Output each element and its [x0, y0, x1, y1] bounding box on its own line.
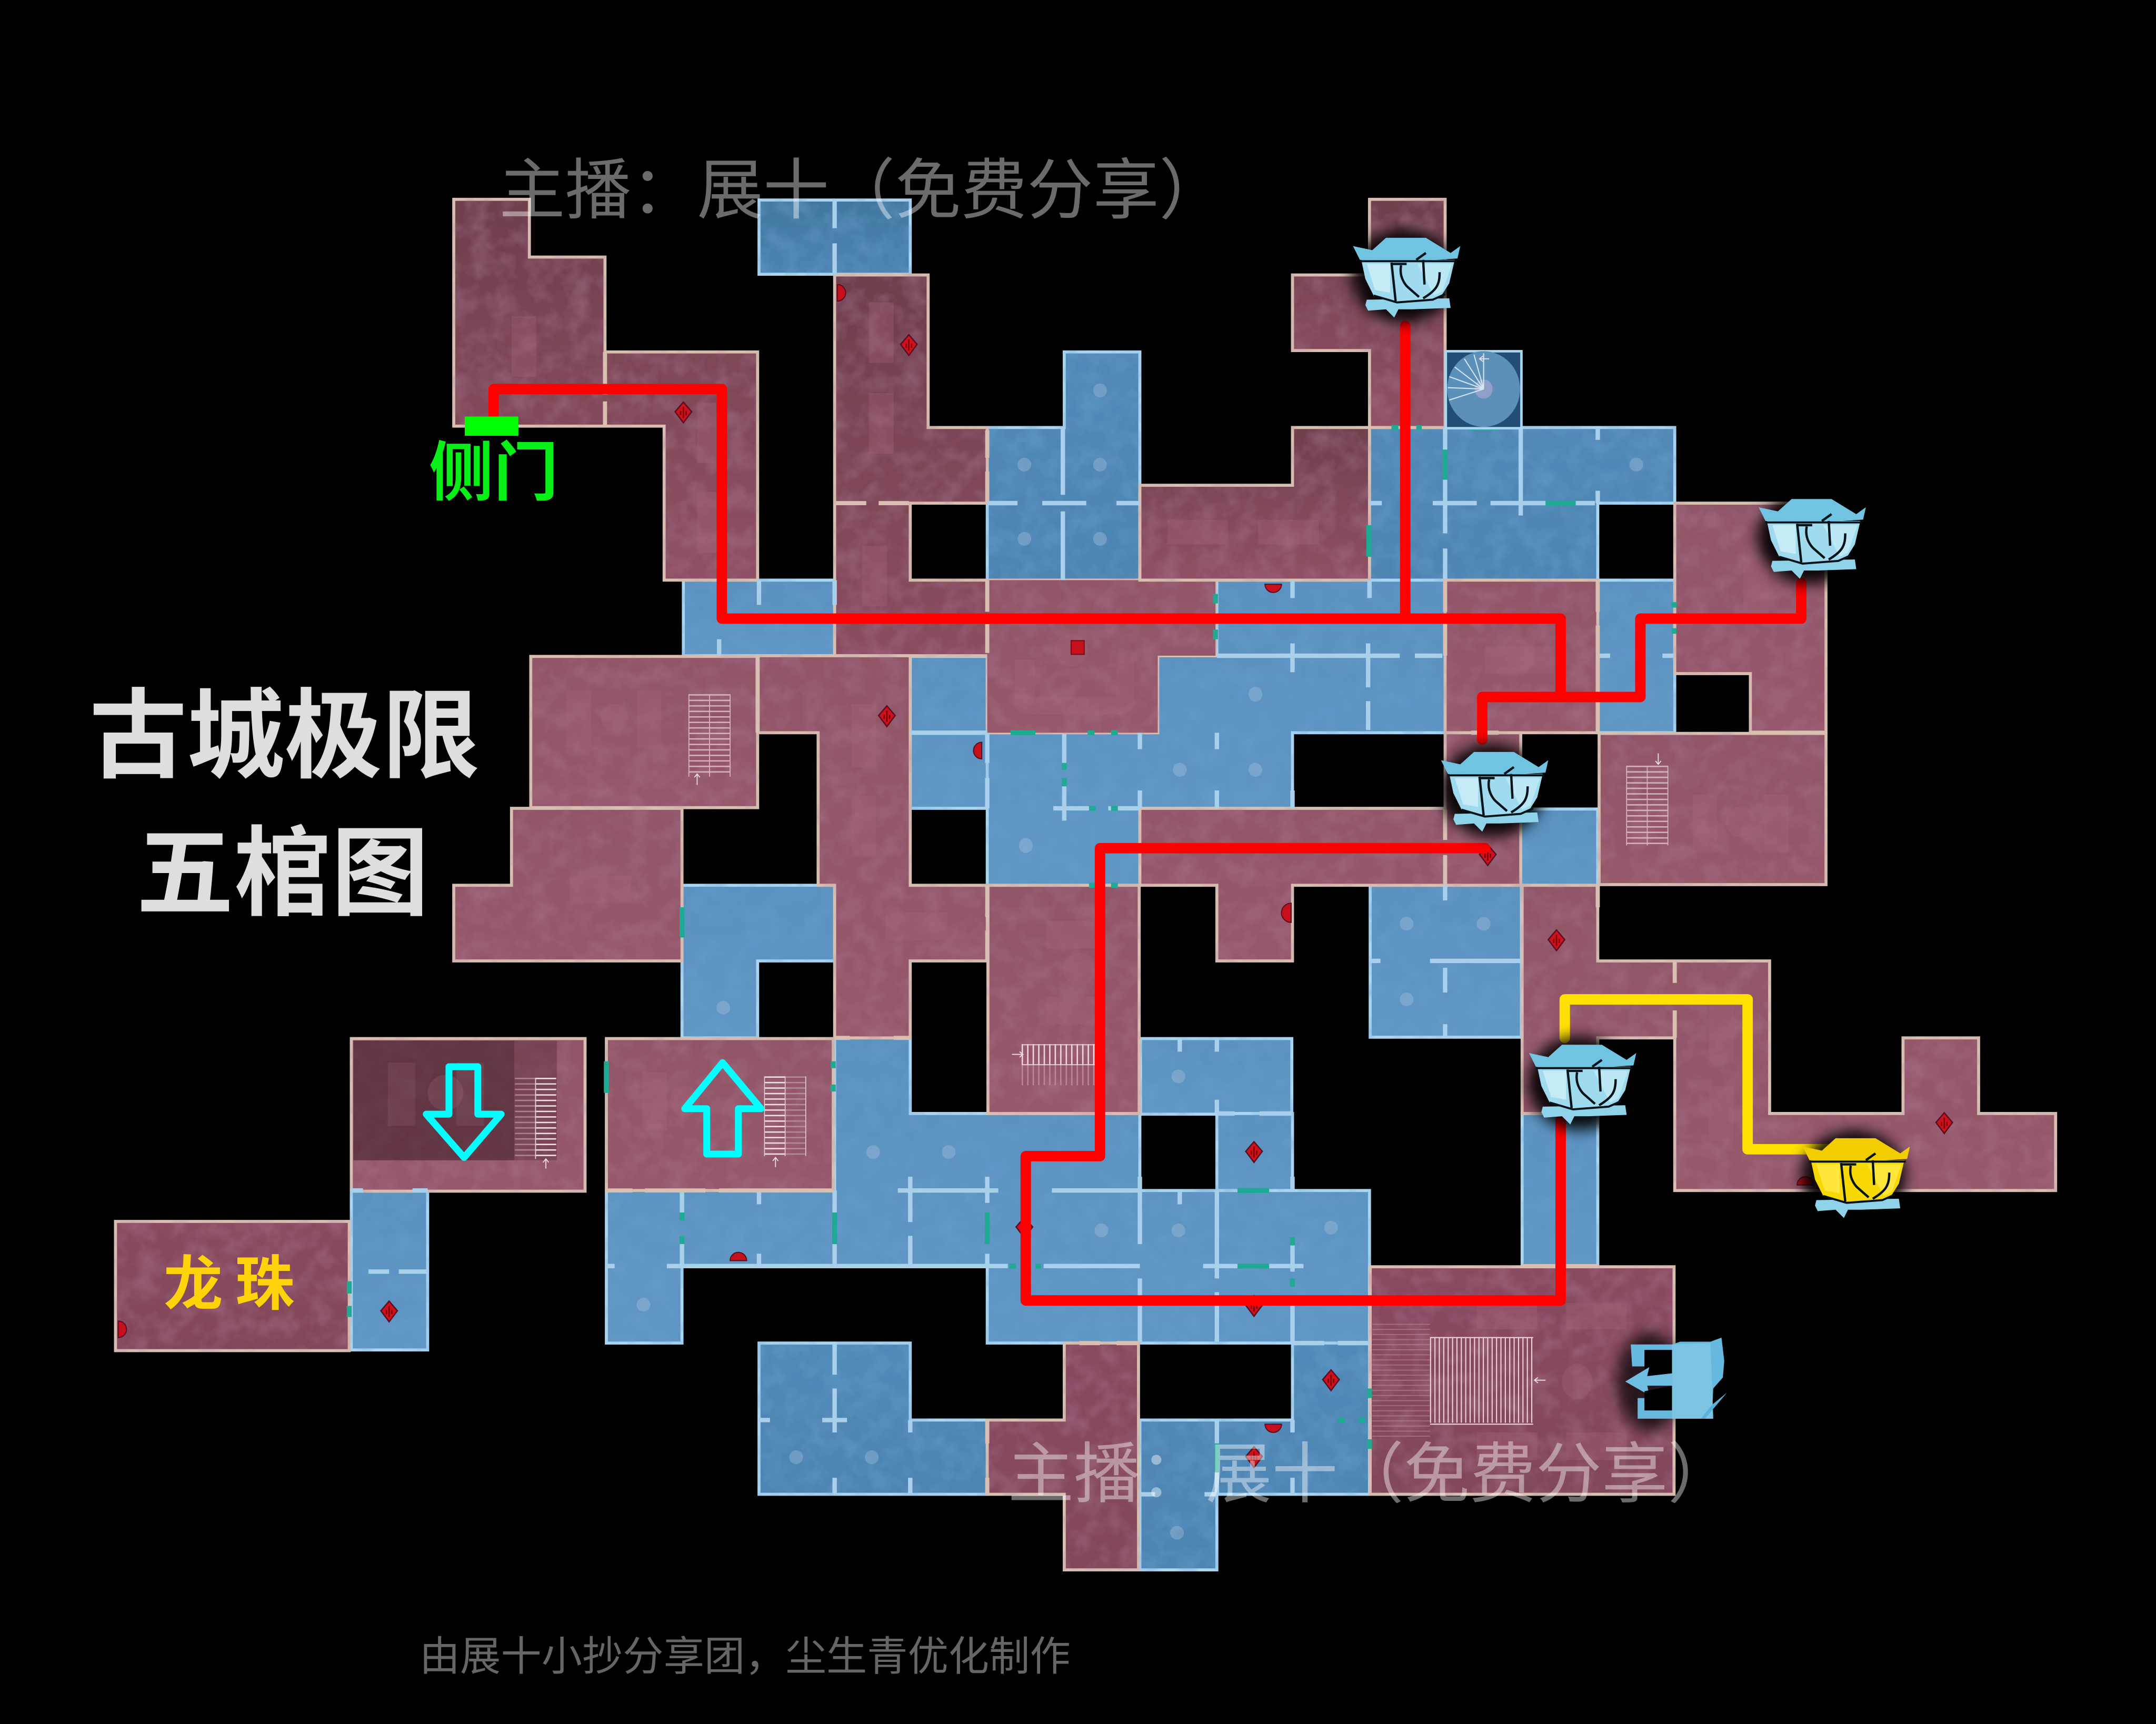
label: side door: 侧门 [429, 420, 558, 514]
main title: 古城极限 [89, 657, 480, 798]
icon: coffin top [1352, 229, 1460, 323]
blue room: right corridor [1522, 1114, 1598, 1266]
icon: coffin yellow [1801, 1130, 1910, 1224]
icon: exit door [1617, 1332, 1727, 1431]
blue room: upper cross [987, 352, 1140, 580]
icon: coffin lower [1528, 1037, 1636, 1130]
route: side door to coffins [494, 326, 1801, 739]
furniture [512, 303, 1789, 1460]
stairs: right room [1626, 766, 1668, 846]
blue room: dragon pearl side [351, 1191, 427, 1350]
markers: enemies [118, 285, 1952, 1468]
label: dragon pearl: 龙 [164, 1237, 223, 1322]
red room: top right tower [1293, 199, 1445, 427]
stairs: upper left room [689, 694, 730, 777]
arrow: up to upper floor [685, 1063, 761, 1154]
red room: stair room [531, 656, 757, 808]
watermark bottom: 展十（免费分享） [1206, 1437, 1734, 1511]
red room: center long [1140, 733, 1521, 961]
red room: large bottom hall [1370, 1267, 1674, 1494]
blue room: lower upper block [1141, 1039, 1292, 1114]
blue room: top hall [759, 200, 910, 274]
blue room: upper right hall [1370, 427, 1675, 580]
red room: right stair [1599, 734, 1826, 885]
stairs: center room [1022, 1045, 1096, 1075]
blue room: central square [1370, 885, 1521, 1037]
red room: side door hall [454, 199, 757, 580]
blue room: right narrow [1598, 580, 1675, 733]
blue room: right small [1521, 809, 1598, 885]
side door marker [465, 417, 518, 436]
pillar dots [636, 384, 1643, 1540]
icon: coffin middle [1440, 744, 1548, 837]
watermark top: 展十（免费分享） [697, 153, 1225, 227]
blue room: lower right [1140, 1343, 1370, 1570]
red room: down stair room [351, 1039, 585, 1191]
floor plan [115, 199, 2055, 1570]
blue room: large lower hall [606, 1038, 1370, 1343]
main title: 五棺图 [136, 795, 429, 936]
blue room: lower left [759, 1343, 987, 1494]
red room: left stepped [454, 808, 682, 961]
label: dragon pearl: 珠 [235, 1237, 294, 1322]
red room: far right [1675, 503, 1826, 733]
red room: pillar corridor [757, 656, 987, 1038]
red rooms [115, 199, 2055, 1570]
watermark top: 主播： [499, 153, 697, 227]
red room: bottom cross [987, 1343, 1139, 1570]
dark lower floor overlay [353, 1040, 557, 1160]
red room: throne room [987, 580, 1215, 733]
blue room: entry corridor [683, 580, 835, 656]
walls and dividers: red [605, 352, 1826, 1494]
route: second red path [1026, 848, 1561, 1300]
main title [89, 657, 480, 936]
icon: coffin right [1757, 491, 1866, 584]
credit: 由展十小抄分享团，尘生青优化制作 [420, 1623, 1071, 1682]
blue room: corridor left of main hall [910, 656, 987, 808]
stairs: up stair room [764, 1076, 806, 1156]
red room: center right [1445, 580, 1598, 733]
red room: dragon pearl [115, 1221, 350, 1351]
stairs: down stair room [525, 1078, 546, 1159]
blue room: link [1217, 1114, 1293, 1190]
teal doors [350, 427, 1674, 1472]
route: yellow path [1565, 999, 1829, 1149]
red room: far right zigzag [1522, 885, 2055, 1190]
stair direction arrows [543, 356, 1661, 1383]
arrow: down to lower floor [426, 1067, 501, 1157]
red room: top center hall [835, 275, 1215, 733]
blue room: left L [682, 885, 835, 1038]
watermark bottom: 主播： [1008, 1437, 1206, 1511]
red room: up stair room [606, 1039, 833, 1190]
blue room: main hall middle [987, 580, 1445, 885]
stairs: bottom hall [1401, 1324, 1533, 1439]
walls and dividers: blue [351, 199, 1673, 1494]
blue rooms [351, 200, 1675, 1570]
red room: center stair [988, 885, 1139, 1114]
red room: upper middle [1140, 427, 1370, 580]
icon: spiral stairs [1446, 351, 1521, 428]
